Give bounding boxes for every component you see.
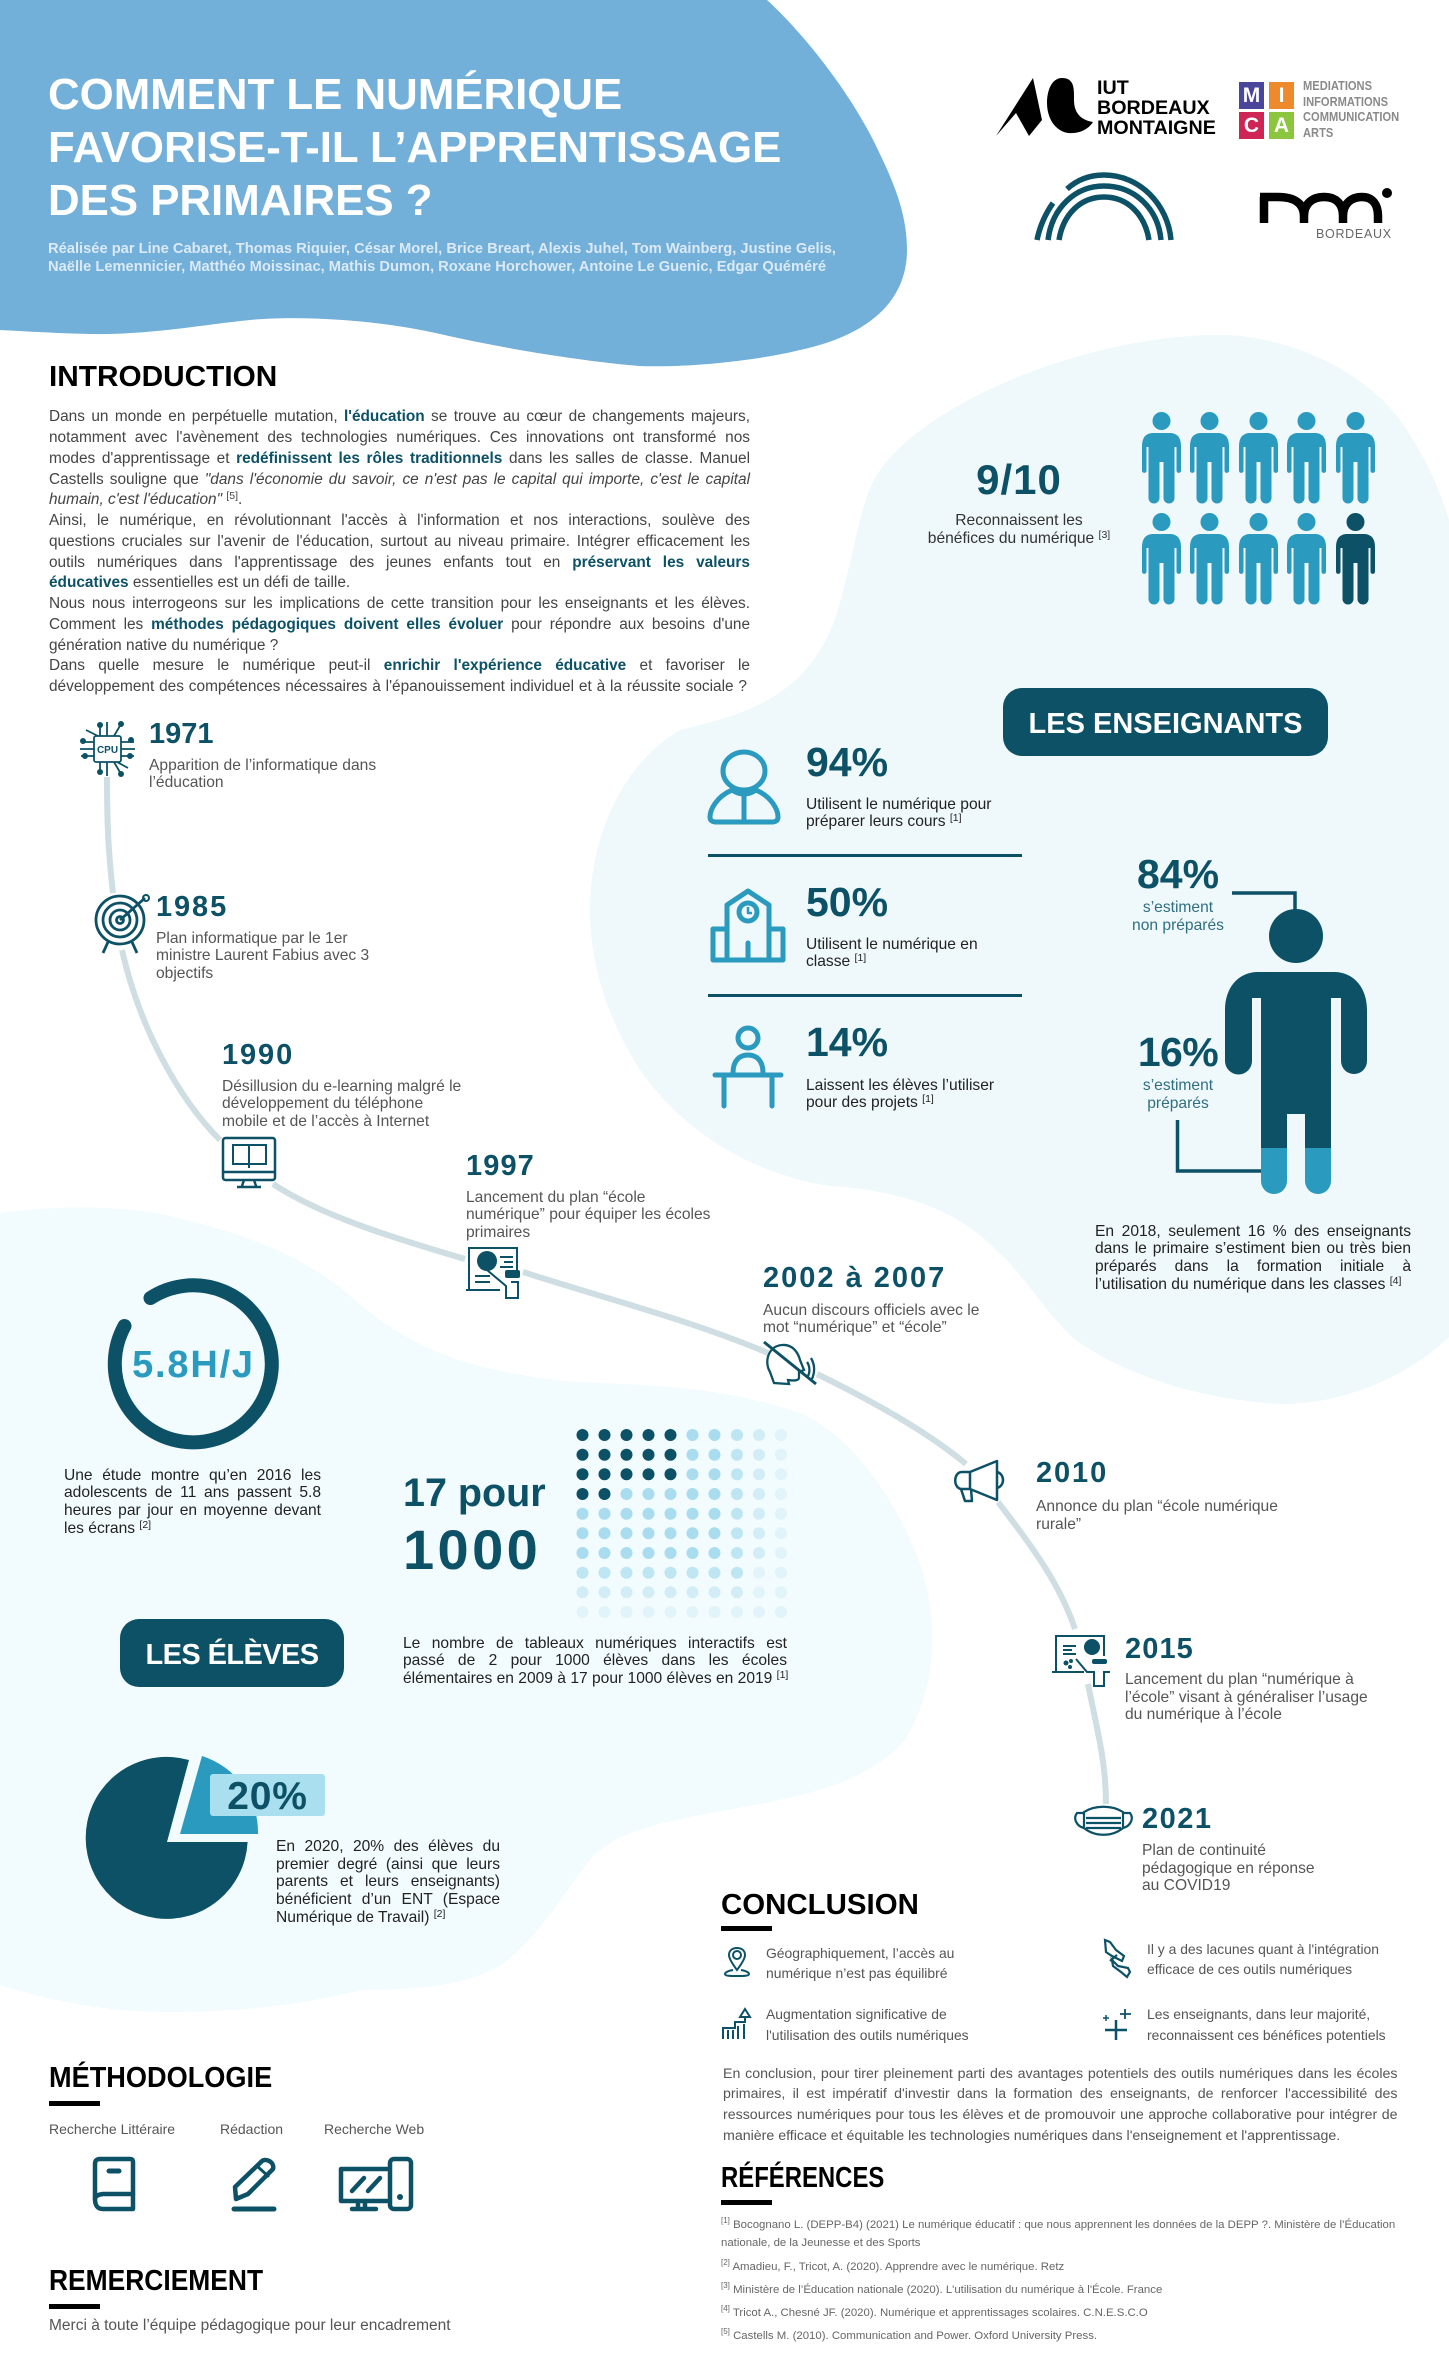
timeline: 1997 bbox=[466, 1150, 710, 1241]
timeline: 2015: 2015 bbox=[1125, 1632, 1194, 1664]
conclusion point: gaps: efficace de ces outils numériques bbox=[1147, 1961, 1352, 1977]
conclusion paragraph: ressources numériques pour tous les élèves et de promouvoir une approche collaborative pour intégrer de bbox=[723, 2107, 1398, 2123]
teachers paragraph bbox=[1095, 1222, 1412, 1293]
introduction text: Nous nous interrogeons sur les implications de cette transition pour les enseignants et les élèves. bbox=[49, 595, 750, 612]
icon: school bbox=[710, 888, 786, 962]
stat: 50%: 50% bbox=[806, 879, 888, 925]
pictogram: 9 of 10 people bbox=[1142, 412, 1375, 604]
logo: MICA: INFORMATIONS bbox=[1303, 94, 1388, 108]
introduction text: questions cruciales sur l'avenir de l'éducation, surtout au niveau primaire. Intégrer efficacement les bbox=[49, 533, 750, 550]
timeline: 1997: Lancement du plan “école bbox=[466, 1188, 645, 1206]
logo: MICA: A bbox=[1274, 114, 1289, 137]
ENT paragraph: parents et leurs enseignants) bbox=[276, 1873, 500, 1890]
timeline: 2015: Lancement du plan “numérique à bbox=[1125, 1671, 1354, 1688]
timeline: 1985: ministre Laurent Fabius avec 3 bbox=[156, 947, 369, 964]
timeline: 2021: pédagogique en réponse bbox=[1142, 1860, 1315, 1877]
screen time paragraph: heures par jour en moyenne devant bbox=[64, 1502, 321, 1519]
logo: IUT Bordeaux Montaigne bbox=[996, 76, 1216, 138]
timeline: 2010 bbox=[1036, 1457, 1278, 1533]
title bbox=[48, 70, 781, 224]
timeline: 2010: Annonce du plan “école numérique bbox=[1036, 1498, 1278, 1515]
screen time paragraph: Une étude montre qu’en 2016 les bbox=[64, 1466, 321, 1484]
conclusion paragraph: primaires, il est impératif d'investir dans la formation des enseignants, de renforcer l'accessibilité des bbox=[723, 2086, 1398, 2102]
logo: mm Bordeaux bbox=[1260, 188, 1392, 241]
timeline: 2021: au COVID19 bbox=[1142, 1877, 1230, 1894]
timeline: 2010: 2010 bbox=[1036, 1457, 1108, 1489]
references list: [1] Bocognano L. (DEPP-B4) (2021) Le numérique éducatif : que nous apprennent les données de la DEPP ?. Ministère de l’Éducation bbox=[721, 2216, 1395, 2231]
stat: 50%: Utilisent le numérique en bbox=[806, 936, 978, 952]
timeline: 2021 bbox=[1142, 1802, 1315, 1894]
logo: IUT Bordeaux Montaigne: MONTAIGNE bbox=[1097, 116, 1216, 138]
stat: 17 pour 1000: 1000 bbox=[403, 1518, 541, 1580]
stat: 17 pour 1000: 17 pour bbox=[403, 1471, 546, 1515]
stat: 16% prepared: préparés bbox=[1147, 1095, 1209, 1112]
icon: target bbox=[94, 894, 150, 954]
icon: face mask bbox=[1074, 1806, 1133, 1836]
heading: conclusion: CONCLUSION bbox=[721, 1889, 919, 1921]
logo: MICA: C bbox=[1244, 114, 1259, 137]
heading: methodologie: MÉTHODOLOGIE bbox=[49, 2062, 272, 2094]
bar bbox=[49, 2101, 100, 2106]
timeline: 1985: Plan informatique par le 1er bbox=[156, 930, 348, 946]
title: DES PRIMAIRES ? bbox=[48, 176, 432, 224]
authors: Réalisée par Line Cabaret, Thomas Riquier, César Morel, Brice Breart, Alexis Juhel, Tom Wainberg, Justine Gelis, bbox=[48, 241, 836, 257]
ENT paragraph: premier degré (ainsi que leurs bbox=[276, 1856, 500, 1873]
timeline: 1971: Apparition de l’informatique dans bbox=[149, 756, 376, 774]
introduction text: Comment les méthodes pédagogiques doivent elles évoluer pour répondre aux besoins d'une bbox=[49, 616, 750, 633]
logo: MICA: I bbox=[1279, 84, 1284, 107]
stat: 9/10: Reconnaissent les bbox=[955, 512, 1083, 529]
conclusion point: benefits bbox=[1147, 2004, 1386, 2045]
introduction text: génération native du numérique ? bbox=[49, 637, 278, 654]
pictogram: teacher preparedness figure bbox=[1176, 891, 1367, 1194]
ENT paragraph bbox=[276, 1838, 500, 1927]
heading: remerciement: REMERCIEMENT bbox=[49, 2265, 263, 2297]
stat: 94%: préparer leurs cours [1] bbox=[806, 812, 962, 830]
conclusion point: gaps: Il y a des lacunes quant à l'intégration bbox=[1147, 1940, 1379, 1956]
stat: 9/10 bbox=[928, 456, 1110, 547]
icon: desktop computer bbox=[335, 2154, 417, 2214]
timeline: 2015 bbox=[1125, 1632, 1368, 1723]
timeline: 1971: l’éducation bbox=[149, 774, 224, 791]
timeline: 1990: mobile et de l’accès à Internet bbox=[222, 1113, 429, 1130]
stat: 14% bbox=[806, 1019, 994, 1111]
references list: [2] Amadieu, F., Tricot, A. (2020). Apprendre avec le numérique. Retz bbox=[721, 2258, 1064, 2273]
authors bbox=[48, 241, 836, 275]
stat: 84% not prepared: 84% bbox=[1137, 851, 1219, 897]
icon: broken plug bbox=[1101, 1937, 1133, 1979]
introduction text: modes d'apprentissage et redéfinissent les rôles traditionnels dans les salles de classe. Manuel bbox=[49, 450, 750, 467]
timeline: 1990: développement du téléphone bbox=[222, 1095, 423, 1112]
introduction text: humain, c'est l'éducation" [5]. bbox=[49, 490, 242, 508]
bar bbox=[49, 2304, 100, 2309]
stat: 17 pour 1000 bbox=[403, 1471, 546, 1580]
icon: silent head bbox=[763, 1340, 817, 1386]
timeline: 2002 a 2007: mot “numérique” et “école” bbox=[763, 1319, 947, 1336]
icon: pencil bbox=[228, 2154, 280, 2214]
timeline: 2021: Plan de continuité bbox=[1142, 1842, 1266, 1859]
conclusion point: growth: l'utilisation des outils numériques bbox=[766, 2027, 969, 2043]
timeline: 2015: l’école” visant à généraliser l’usage bbox=[1125, 1689, 1368, 1706]
title: FAVORISE-T-IL L’APPRENTISSAGE bbox=[48, 122, 781, 172]
label: les eleves: LES ÉLÈVES bbox=[146, 1639, 318, 1671]
teachers paragraph: préparés dans la formation initiale à bbox=[1095, 1258, 1411, 1275]
conclusion paragraph: manière efficace et équitable les technologies numériques dans l'enseignement et l'apprentissage. bbox=[723, 2128, 1340, 2144]
stat: 14%: Laissent les élèves l’utiliser bbox=[806, 1076, 994, 1094]
stat: 50%: classe [1] bbox=[806, 952, 866, 970]
logo: MICA: COMMUNICATION bbox=[1303, 110, 1399, 124]
logo: mm Bordeaux: BORDEAUX bbox=[1316, 227, 1392, 241]
icon: teacher bust bbox=[708, 750, 780, 824]
ENT paragraph: En 2020, 20% des élèves du bbox=[276, 1838, 500, 1855]
timeline: 2002 a 2007: 2002 à 2007 bbox=[763, 1262, 946, 1294]
stat: 50% bbox=[806, 879, 978, 970]
interactive boards paragraph: élémentaires en 2009 à 17 pour 1000 élèves en 2019 [1] bbox=[403, 1669, 788, 1687]
authors: Naëlle Lemennicier, Matthéo Moissinac, Mathis Dumon, Roxane Horchower, Antoine Le Guenic, Edgar Quéméré bbox=[48, 259, 826, 275]
teachers background blob bbox=[590, 335, 1449, 1404]
timeline: 1997: 1997 bbox=[466, 1150, 535, 1182]
conclusion point: geography: numérique n’est pas équilibré bbox=[766, 1965, 947, 1981]
thanks text: Merci à toute l’équipe pédagogique pour leur encadrement bbox=[49, 2317, 451, 2334]
timeline: 1985: 1985 bbox=[156, 890, 228, 922]
timeline: 2010: rurale” bbox=[1036, 1516, 1081, 1533]
conclusion paragraph bbox=[723, 2064, 1398, 2146]
conclusion point: geography: Géographiquement, l’accès au bbox=[766, 1944, 954, 1960]
timeline: 2015: du numérique à l’école bbox=[1125, 1706, 1282, 1723]
timeline: 1985 bbox=[156, 890, 369, 982]
introduction text: Ainsi, le numérique, en révolutionnant l'accès à l'information et nos interactions, soulève des bbox=[49, 512, 750, 529]
screen time paragraph bbox=[64, 1466, 321, 1537]
icon: megaphone bbox=[954, 1460, 1004, 1502]
dot matrix: 17 of 1000 bbox=[576, 1429, 787, 1618]
conclusion point: benefits: reconnaissent ces bénéfices potentiels bbox=[1147, 2027, 1386, 2043]
heading: introduction: INTRODUCTION bbox=[49, 361, 277, 393]
timeline: 1971 bbox=[149, 718, 376, 791]
divider bbox=[708, 854, 1022, 856]
stat: 16% prepared: s’estiment bbox=[1143, 1077, 1213, 1094]
timeline: 2021: 2021 bbox=[1142, 1802, 1213, 1834]
method label: redaction: Rédaction bbox=[220, 2121, 283, 2137]
bar bbox=[721, 1926, 772, 1931]
introduction text: Dans quelle mesure le numérique peut-il enrichir l'expérience éducative et favoriser le bbox=[49, 657, 750, 674]
stat: 94%: Utilisent le numérique pour bbox=[806, 796, 992, 812]
ENT paragraph: bénéficient d’un ENT (Espace bbox=[276, 1891, 500, 1908]
students background blob bbox=[0, 1207, 932, 2012]
timeline: 1997: numérique” pour équiper les écoles bbox=[466, 1206, 710, 1223]
references list: [5] Castells M. (2010). Communication and Power. Oxford University Press. bbox=[721, 2327, 1097, 2342]
introduction text: outils numériques dans l'apprentissage des jeunes enfants tout en préservant les valeurs bbox=[49, 554, 750, 571]
logo: IUT Bordeaux Montaigne: BORDEAUX bbox=[1097, 96, 1210, 118]
conclusion point: growth bbox=[766, 2004, 969, 2045]
references list: [3] Ministère de l’Éducation nationale (2020). L'utilisation du numérique à l'École. France bbox=[721, 2281, 1162, 2296]
logo: MICA: M bbox=[1243, 84, 1260, 107]
logo: arches bbox=[1034, 172, 1174, 240]
interactive boards paragraph bbox=[403, 1634, 788, 1687]
conclusion point: gaps bbox=[1147, 1938, 1379, 1980]
icon: growth chart bbox=[720, 2006, 754, 2042]
timeline: 2002 a 2007 bbox=[763, 1262, 979, 1336]
stat: 9/10: bénéfices du numérique [3] bbox=[928, 529, 1110, 547]
heading: references: RÉFÉRENCES bbox=[721, 2162, 884, 2194]
method label: recherche web: Recherche Web bbox=[324, 2121, 424, 2137]
stat: 14%: pour des projets [1] bbox=[806, 1093, 934, 1111]
logo: MICA bbox=[1239, 79, 1399, 140]
introduction text bbox=[49, 408, 750, 695]
introduction text: Dans un monde en perpétuelle mutation, l'éducation se trouve au cœur de changements majeurs, bbox=[49, 408, 750, 425]
timeline: 1990 bbox=[222, 1038, 461, 1130]
stat: 84% not prepared: s’estiment bbox=[1143, 899, 1213, 916]
label: les eleves bbox=[120, 1619, 344, 1687]
teachers paragraph: En 2018, seulement 16 % des enseignants bbox=[1095, 1222, 1411, 1240]
interactive boards paragraph: passé de 2 pour 1000 élèves dans les écoles bbox=[403, 1652, 787, 1669]
conclusion paragraph: En conclusion, pour tirer pleinement parti des avantages potentiels des outils numériques dans les écoles bbox=[723, 2066, 1398, 2082]
references list: nationale, de la Jeunesse et des Sports bbox=[721, 2237, 920, 2249]
conclusion point: geography bbox=[766, 1942, 954, 1984]
logo: MICA: MEDIATIONS bbox=[1303, 79, 1372, 93]
icon: teacher at desk bbox=[712, 1026, 784, 1108]
conclusion point: benefits: Les enseignants, dans leur majorité, bbox=[1147, 2006, 1370, 2022]
teachers paragraph: dans le primaire s’estiment bien ou très bien bbox=[1095, 1240, 1411, 1257]
ENT paragraph: Numérique de Travail) [2] bbox=[276, 1908, 445, 1926]
stat: 16% prepared bbox=[1138, 1029, 1218, 1112]
icon: presenter at board bbox=[1052, 1635, 1110, 1687]
teachers paragraph: l’utilisation du numérique dans les classes [4] bbox=[1095, 1275, 1401, 1293]
interactive boards paragraph: Le nombre de tableaux numériques interactifs est bbox=[403, 1634, 787, 1652]
timeline: 1990: 1990 bbox=[222, 1038, 294, 1070]
timeline: 1990: Désillusion du e-learning malgré le bbox=[222, 1078, 461, 1094]
method label: recherche litteraire: Recherche Littéraire bbox=[49, 2121, 175, 2137]
icon: CPU: CPU bbox=[97, 745, 118, 756]
stat: 94% bbox=[806, 739, 992, 830]
screen time paragraph: les écrans [2] bbox=[64, 1519, 151, 1537]
introduction text: éducatives essentielles est un défi de taille. bbox=[49, 574, 350, 591]
icon and stat: 5.8 hours per day ring: 5.8H/J bbox=[132, 1344, 255, 1386]
icon: CPU bbox=[80, 721, 135, 777]
stat: 14%: 14% bbox=[806, 1019, 888, 1065]
icon and stat: 5.8 hours per day ring bbox=[108, 1278, 279, 1450]
logo: IUT Bordeaux Montaigne: IUT bbox=[1097, 76, 1129, 98]
icon: map pin bbox=[722, 1946, 752, 1978]
stat: 9/10: 9/10 bbox=[976, 456, 1062, 503]
introduction text: Castells souligne que "dans l'économie du savoir, ce n'est pas le capital qui importe, c'est le capital bbox=[49, 471, 750, 488]
stat: 84% not prepared bbox=[1132, 851, 1224, 934]
timeline: 1971: 1971 bbox=[149, 718, 214, 750]
stat: 84% not prepared: non préparés bbox=[1132, 917, 1224, 934]
timeline line bbox=[107, 777, 1106, 1804]
icon: monitor with book bbox=[222, 1136, 276, 1188]
stat: 94%: 94% bbox=[806, 739, 888, 785]
icon: teacher at board bbox=[466, 1247, 520, 1299]
timeline: 1997: primaires bbox=[466, 1224, 530, 1241]
logo: MICA: ARTS bbox=[1303, 126, 1333, 140]
introduction text: développement des compétences nécessaires à l'épanouissement individuel et à la réussite sociale ? bbox=[49, 678, 747, 695]
header blob bbox=[0, 0, 907, 366]
stat: 16% prepared: 16% bbox=[1138, 1029, 1218, 1075]
label: les enseignants: LES ENSEIGNANTS bbox=[1029, 708, 1302, 740]
bar bbox=[721, 2200, 772, 2205]
timeline: 2002 a 2007: Aucun discours officiels avec le bbox=[763, 1302, 979, 1318]
introduction text: notamment avec l'avènement des technologies numériques. Ces innovations ont transformé nos bbox=[49, 429, 750, 446]
pie label: 20% bbox=[210, 1774, 325, 1816]
conclusion point: growth: Augmentation significative de bbox=[766, 2006, 947, 2022]
references list: [4] Tricot A., Chesné JF. (2020). Numérique et apprentissages scolaires. C.N.E.S.C.O bbox=[721, 2304, 1148, 2319]
timeline: 1985: objectifs bbox=[156, 965, 213, 982]
title: COMMENT LE NUMÉRIQUE bbox=[48, 70, 622, 118]
divider bbox=[708, 994, 1022, 996]
pie label: 20%: 20% bbox=[227, 1775, 308, 1818]
screen time paragraph: adolescents de 11 ans passent 5.8 bbox=[64, 1484, 321, 1501]
icon: plus signs bbox=[1101, 2006, 1133, 2042]
references list bbox=[721, 2216, 1421, 2345]
pie chart: 20% bbox=[80, 1750, 265, 1925]
icon: book bbox=[90, 2154, 138, 2214]
label: les enseignants bbox=[1003, 688, 1328, 756]
